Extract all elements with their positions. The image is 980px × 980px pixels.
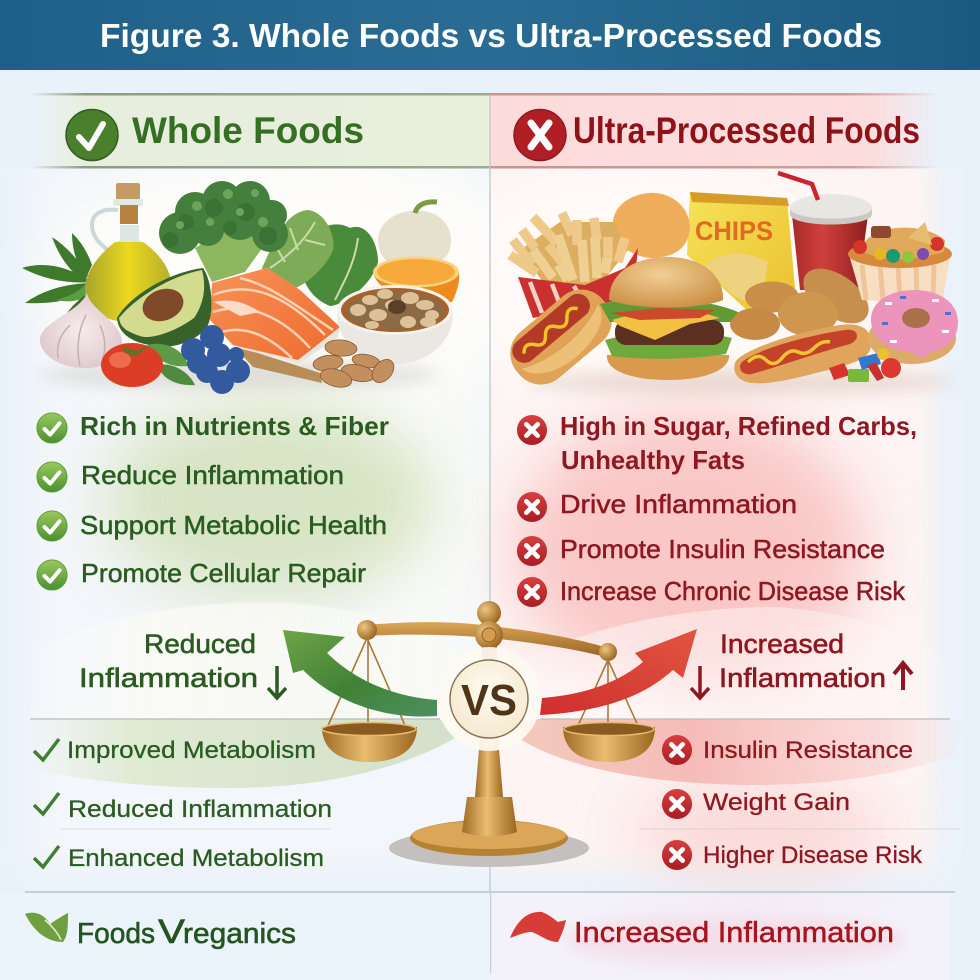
item [662, 735, 913, 765]
heading text: Whole Foods [132, 110, 364, 151]
footer: foodsvreganics [25, 913, 296, 951]
panel tint: lower right [630, 785, 890, 875]
label: reduced inflammation: Reduced [144, 629, 256, 659]
item: Increase Chronic Disease Risk [560, 576, 906, 606]
item: High in Sugar, Refined Carbs, [560, 411, 917, 441]
list: whole foods outcomes [34, 737, 332, 872]
beam [367, 622, 608, 657]
footer: foodsvreganics: Foods [77, 918, 155, 950]
arrow: green curved [283, 630, 437, 717]
squash [378, 202, 451, 264]
left pan [322, 722, 417, 762]
bucket of candy [848, 222, 952, 305]
fries [510, 213, 628, 285]
item: Insulin Resistance [703, 737, 913, 764]
list: ultra-processed outcomes [662, 735, 923, 870]
basil leaves [147, 344, 195, 385]
icon: leaf [25, 913, 68, 942]
title: Figure 3. Whole Foods vs Ultra-Processed Foods [100, 17, 882, 54]
vs badge [437, 647, 541, 751]
item [517, 411, 917, 475]
soda cup [778, 173, 872, 290]
salmon [210, 268, 340, 363]
item: Enhanced Metabolism [68, 845, 324, 872]
panel heading: whole foods [30, 93, 490, 168]
effect panels [20, 602, 965, 829]
icon: down arrow [268, 666, 286, 698]
orange [373, 256, 459, 303]
item: Weight Gain [703, 789, 850, 816]
chips bag: CHIPS [695, 216, 773, 246]
item: Unhealthy Fats [561, 445, 745, 475]
item: Promote Cellular Repair [81, 558, 366, 588]
burger [600, 257, 738, 380]
scale pans [322, 722, 655, 762]
footer: foodsvreganics: V [158, 913, 185, 951]
pillar [475, 737, 503, 797]
olive oil bottle [85, 183, 172, 322]
panel heading: ultra-processed foods [490, 93, 940, 168]
divider [489, 95, 491, 892]
illustration: whole foods group [22, 181, 459, 394]
blueberries [181, 325, 250, 394]
footer rule [25, 891, 955, 893]
hot dog right [734, 324, 871, 383]
header band [0, 0, 980, 70]
garlic [40, 293, 122, 368]
item [662, 789, 850, 819]
panel tint: ultra-processed risks [515, 410, 865, 690]
list: ultra-processed risks [517, 411, 917, 607]
base [389, 820, 589, 867]
item: Reduce Inflammation [81, 460, 344, 490]
label: reduced inflammation: Inflammation [79, 663, 258, 693]
item: Higher Disease Risk [703, 842, 923, 869]
cutting board [233, 345, 322, 383]
arrow: red curved [540, 629, 697, 715]
heading text: Ultra-Processed Foods [573, 110, 920, 151]
label: increased inflammation: Inflammation [719, 663, 886, 693]
fries box [518, 248, 638, 318]
list: whole foods benefits [37, 411, 389, 590]
scale stand and beam [327, 601, 640, 867]
label: increased inflammation [691, 629, 912, 698]
chains [327, 638, 640, 733]
almonds [312, 339, 398, 390]
bowl of nuts [337, 285, 453, 364]
tomato [101, 343, 163, 387]
icon: down arrow [691, 666, 709, 698]
item: Rich in Nutrients & Fiber [80, 411, 389, 441]
nuggets [730, 258, 878, 340]
icon: green check [66, 110, 118, 160]
avocado [117, 268, 211, 347]
broccoli [159, 181, 288, 282]
hot dog left [499, 278, 623, 396]
page background [30, 168, 950, 980]
item: Drive Inflammation [560, 489, 797, 519]
footer: increased inflammation: Increased Inflammation [574, 917, 894, 949]
palm leaves [22, 233, 92, 316]
label: reduced inflammation [79, 629, 286, 698]
kale [262, 210, 378, 306]
icon: red cross [514, 110, 566, 160]
item: Support Metabolic Health [80, 510, 387, 540]
item: Promote Insulin Resistance [560, 534, 885, 564]
chips bag [687, 192, 795, 313]
donut [868, 290, 958, 364]
item: Reduced Inflammation [68, 796, 332, 823]
panel tint: whole foods benefits [105, 400, 435, 600]
footer: foodsvreganics: reganics [183, 918, 296, 950]
cracker [613, 193, 690, 258]
candies [829, 348, 901, 382]
right pan [563, 722, 655, 762]
icon: red leaf [510, 912, 566, 942]
illustration: ultra-processed foods group [499, 173, 958, 396]
vs badge: VS [461, 676, 517, 725]
icon: up arrow [894, 663, 912, 690]
label: increased inflammation: Increased [720, 629, 844, 659]
footer: increased inflammation [490, 893, 905, 973]
item: Improved Metabolism [67, 737, 316, 764]
